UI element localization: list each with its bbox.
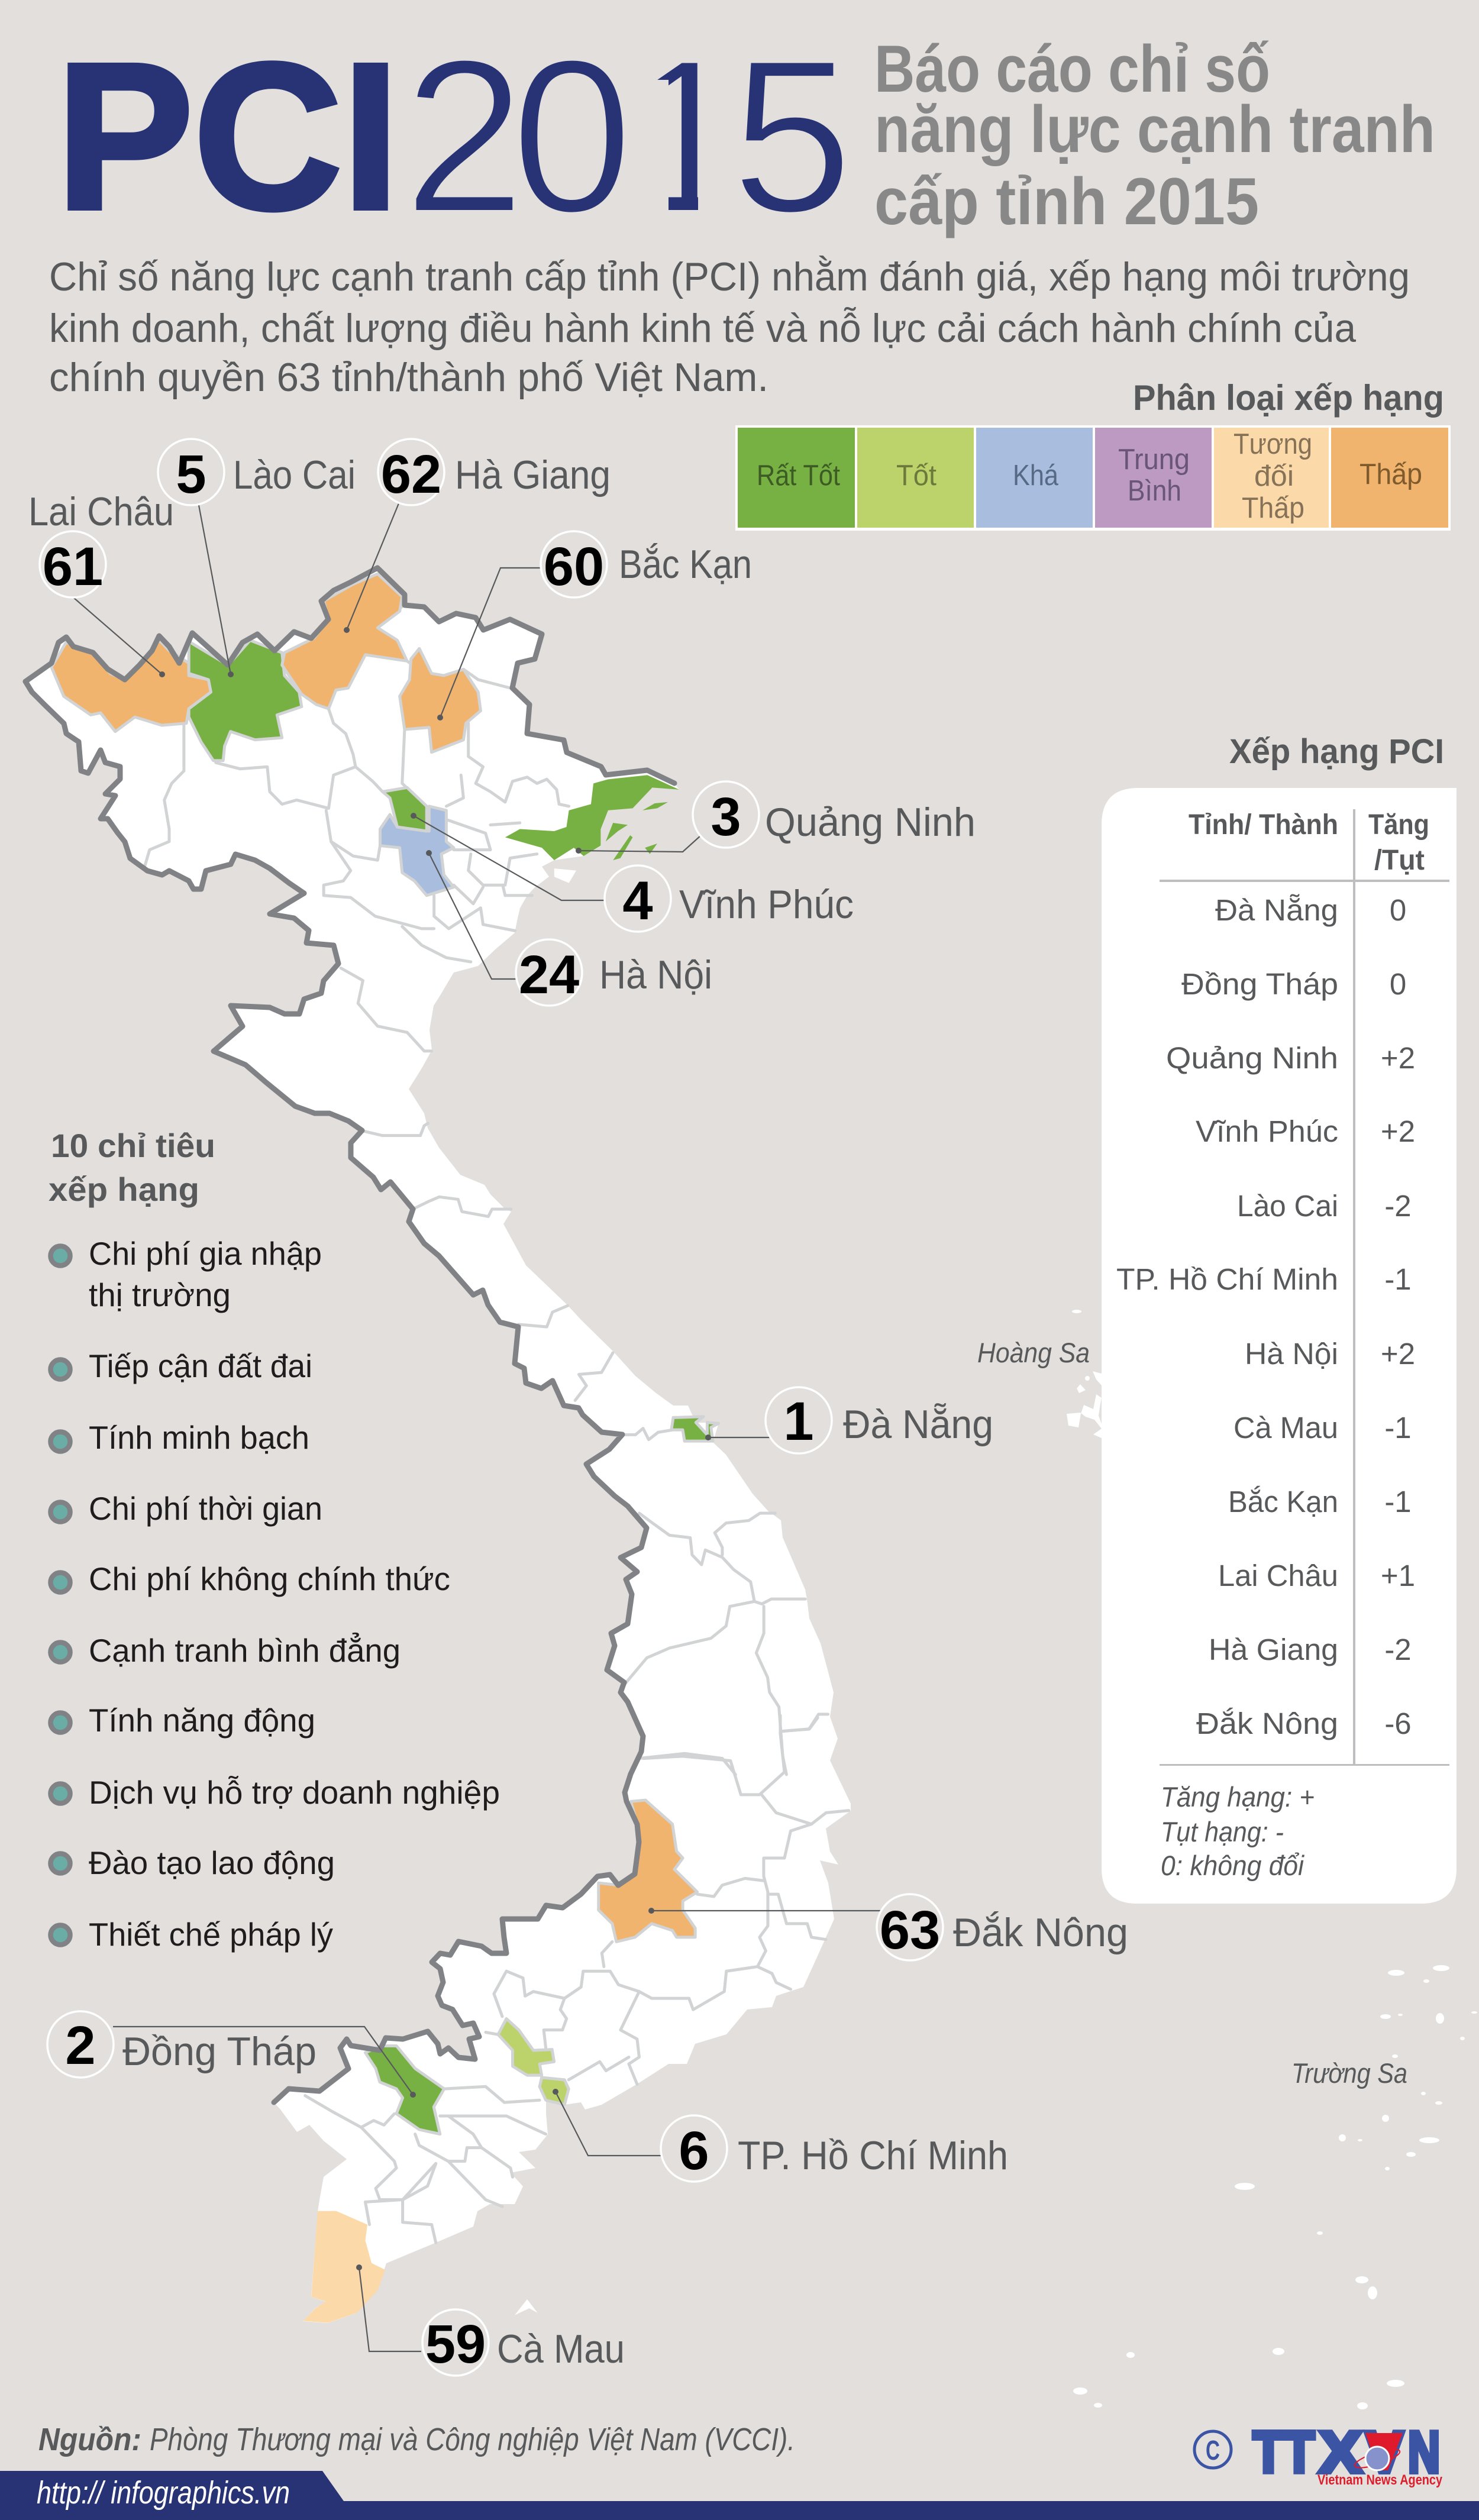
province boundaries: centre xyxy=(362,1123,828,1775)
Quảng Ninh islands xyxy=(642,802,668,810)
table rows: Hà Giang xyxy=(1209,1633,1338,1666)
table header xyxy=(1189,809,1429,876)
callout: Đà Nẵng 1 xyxy=(705,1387,993,1453)
legend: rating categories: Tốt xyxy=(896,460,937,492)
label: Trường Sa: Trường Sa xyxy=(1291,2057,1407,2089)
Vĩnh Phúc xyxy=(383,787,427,831)
island xyxy=(515,2299,538,2315)
callout: Quảng Ninh 3 xyxy=(576,781,976,854)
source: Nguồn: xyxy=(38,2422,141,2457)
icon: copyright xyxy=(1194,2431,1231,2468)
subtitle: Báo cáo chỉ số xyxy=(874,32,1270,106)
legend: rating categories: đối xyxy=(1254,460,1294,492)
indicator names: Chi phí không chính thức xyxy=(89,1561,450,1597)
table panel: PCI ranking xyxy=(1102,788,1457,1904)
callout: Bắc Kạn 60 xyxy=(437,531,752,721)
intro paragraph xyxy=(49,254,1410,400)
highlighted provinces: south xyxy=(303,1800,697,2323)
table rows: -1 xyxy=(1384,1485,1412,1519)
logo: TTXVN: V xyxy=(1365,2419,1403,2485)
callout: Quảng Ninh 3: Quảng Ninh xyxy=(765,800,976,845)
callout: Đắk Nông 63: 63 xyxy=(880,1900,940,1960)
table header: Tỉnh/ Thành xyxy=(1189,809,1338,841)
callout: Cà Mau 59 xyxy=(356,2264,625,2376)
islands: Hoàng Sa xyxy=(1067,1371,1102,1438)
footer url: http:// infographics.vn xyxy=(37,2475,290,2511)
table rows: -6 xyxy=(1384,1707,1412,1740)
table notes: Tăng hạng: + xyxy=(1161,1781,1315,1813)
national border: western xyxy=(25,681,647,2102)
table rows: -1 xyxy=(1384,1262,1412,1296)
callout: Đà Nẵng 1: 1 xyxy=(783,1391,814,1452)
callout: Hà Nội 24: Hà Nội xyxy=(599,952,712,997)
title: PCI 2015: 5 xyxy=(731,14,853,259)
callout: Lai Châu 61 xyxy=(28,489,174,677)
table rows: +1 xyxy=(1381,1559,1415,1592)
label: Hoàng Sa: Hoàng Sa xyxy=(977,1337,1090,1368)
Lai Châu xyxy=(51,640,211,732)
callout: TP. Hồ Chí Minh 6: TP. Hồ Chí Minh xyxy=(738,2133,1008,2178)
callout: Đắk Nông 63 xyxy=(648,1894,1128,1960)
table rows: +2 xyxy=(1381,1337,1415,1371)
table rows: -1 xyxy=(1384,1411,1412,1445)
table rows: Hà Nội xyxy=(1245,1337,1338,1371)
footer bar xyxy=(0,2471,1479,2520)
Hà Giang xyxy=(282,574,407,709)
callout: Hà Nội 24 xyxy=(426,850,712,1006)
table heading: Xếp hạng PCI xyxy=(1229,732,1444,771)
callout: Hà Giang 62: 62 xyxy=(381,444,441,505)
icon: copyright: C xyxy=(1206,2435,1220,2466)
legend: rating categories: Bình xyxy=(1128,475,1181,507)
logo: TTXVN: X xyxy=(1319,2419,1362,2485)
callout: TP. Hồ Chí Minh 6 xyxy=(553,2089,1008,2182)
table rows: Bắc Kạn xyxy=(1228,1485,1338,1519)
list heading: 10 chỉ tiêu: 10 chỉ tiêu xyxy=(51,1127,215,1164)
intro paragraph: chính quyền 63 tỉnh/thành phố Việt Nam. xyxy=(49,355,768,400)
list: 10 indicators xyxy=(51,1235,500,1953)
table rows: Cà Mau xyxy=(1233,1411,1338,1445)
callout: Cà Mau 59: 59 xyxy=(425,2314,486,2374)
logo: TTXVN: Vietnam News Agency xyxy=(1317,2472,1443,2488)
table rows: 0 xyxy=(1390,967,1406,1001)
white islands xyxy=(554,868,576,883)
table rows: -2 xyxy=(1384,1189,1412,1223)
province boundaries: south xyxy=(305,1715,849,2243)
indicator names: Tính năng động xyxy=(89,1702,315,1739)
indicator names: Chi phí gia nhập xyxy=(89,1235,322,1272)
title: PCI 2015 xyxy=(67,60,842,213)
table rows: Lào Cai xyxy=(1237,1189,1338,1223)
legend: rating categories xyxy=(735,425,1451,531)
table rows xyxy=(1116,893,1415,1740)
indicator names xyxy=(89,1235,500,1953)
source: Phòng Thương mại và Công nghiệp Việt Nam (VCCI). xyxy=(150,2422,795,2457)
table rows: Đà Nẵng xyxy=(1215,893,1338,927)
title: PCI 2015: 2 xyxy=(403,14,525,259)
callout: Lào Cai 5 xyxy=(158,439,356,677)
Đắk Nông xyxy=(599,1800,697,1941)
highlighted provinces: north xyxy=(51,574,679,896)
callout: Bắc Kạn 60: 60 xyxy=(544,537,604,597)
callout: Lào Cai 5: 5 xyxy=(176,444,206,505)
legend: rating categories: Thấp xyxy=(1242,492,1304,524)
callout: Đồng Tháp 2: 2 xyxy=(65,2015,96,2076)
table rows: TP. Hồ Chí Minh xyxy=(1116,1262,1338,1296)
Đồng Tháp xyxy=(365,2046,444,2134)
province boundaries: north xyxy=(145,605,569,1051)
intro paragraph: Chỉ số năng lực cạnh tranh cấp tỉnh (PCI) nhằm đánh giá, xếp hạng môi trường xyxy=(49,254,1410,299)
legend: rating categories: Rất Tốt xyxy=(757,460,840,492)
Hà Nội xyxy=(380,806,454,896)
callout: Hà Nội 24: 24 xyxy=(519,945,579,1005)
bullet marks xyxy=(51,1246,70,1945)
callout: Cà Mau 59: Cà Mau xyxy=(497,2327,625,2372)
table rows: +2 xyxy=(1381,1041,1415,1075)
table rows: +2 xyxy=(1381,1114,1415,1148)
title: PCI 2015: PCI xyxy=(56,20,399,253)
land xyxy=(25,568,851,2323)
callout: TP. Hồ Chí Minh 6: 6 xyxy=(679,2121,709,2181)
callout: Đồng Tháp 2 xyxy=(47,2011,416,2098)
Lào Cai xyxy=(189,640,302,761)
callout: Hà Giang 62: Hà Giang xyxy=(455,453,611,497)
indicator names: Đào tạo lao động xyxy=(89,1844,335,1881)
callout: Quảng Ninh 3: 3 xyxy=(711,787,741,847)
logo: TTXVN: TT xyxy=(1253,2419,1315,2485)
callout: Lào Cai 5: Lào Cai xyxy=(233,453,356,497)
indicator names: thị trường xyxy=(89,1277,231,1313)
callout: Đồng Tháp 2: Đồng Tháp xyxy=(122,2029,317,2074)
table rows: Lai Châu xyxy=(1218,1559,1338,1592)
callout: Vĩnh Phúc 4 xyxy=(411,813,854,932)
table notes: Tụt hạng: - xyxy=(1161,1816,1284,1847)
callout: Lai Châu 61: 61 xyxy=(43,537,103,597)
callout: Lai Châu 61: Lai Châu xyxy=(28,489,174,534)
legend: rating categories: Trung xyxy=(1118,444,1190,476)
subtitle xyxy=(874,32,1435,238)
table rows: Đắk Nông xyxy=(1196,1707,1338,1740)
Quảng Ninh xyxy=(505,775,679,860)
list heading: 10 chỉ tiêu xyxy=(49,1127,215,1208)
Cà Mau xyxy=(303,2211,385,2323)
indicator names: Cạnh tranh bình đẳng xyxy=(89,1632,401,1669)
map of Vietnam xyxy=(25,568,851,2323)
national border xyxy=(25,568,674,783)
table rows: 0 xyxy=(1390,893,1406,927)
subtitle: cấp tỉnh 2015 xyxy=(874,164,1259,238)
legend: rating categories: Thấp xyxy=(1359,458,1422,490)
callout: Bắc Kạn 60: Bắc Kạn xyxy=(619,542,752,587)
callout: Đắk Nông 63: Đắk Nông xyxy=(953,1910,1128,1955)
table header: /Tụt xyxy=(1374,845,1425,876)
table rows: Đồng Tháp xyxy=(1181,967,1338,1001)
table notes: 0: không đổi xyxy=(1161,1850,1304,1881)
intro paragraph: kinh doanh, chất lượng điều hành kinh tế và nỗ lực cải cách hành chính của xyxy=(49,306,1356,351)
table header: Tăng xyxy=(1368,809,1429,841)
title: PCI 2015: 1 xyxy=(625,14,747,259)
legend heading: Phân loại xếp hạng xyxy=(1133,378,1444,418)
islands: Trường Sa xyxy=(1072,1310,1477,2409)
logo: TTXVN xyxy=(1253,2419,1443,2488)
table rows: Quảng Ninh xyxy=(1166,1041,1338,1075)
callout: Vĩnh Phúc 4: 4 xyxy=(622,871,653,931)
logo: TTXVN: N xyxy=(1408,2419,1440,2485)
callout: Hà Giang 62 xyxy=(344,439,611,633)
Long An xyxy=(498,2019,554,2075)
indicator names: Tiếp cận đất đai xyxy=(89,1348,312,1384)
table notes xyxy=(1161,1781,1315,1881)
legend: rating categories: Khá xyxy=(1013,460,1059,492)
indicator names: Thiết chế pháp lý xyxy=(89,1916,333,1953)
callout: Vĩnh Phúc 4: Vĩnh Phúc xyxy=(679,882,854,927)
indicator names: Dịch vụ hỗ trợ doanh nghiệp xyxy=(89,1774,500,1811)
indicator names: Tính minh bạch xyxy=(89,1419,309,1456)
indicator names: Chi phí thời gian xyxy=(89,1490,322,1527)
callout: Đà Nẵng 1: Đà Nẵng xyxy=(843,1402,993,1447)
highlighted province: Đà Nẵng xyxy=(671,1417,719,1441)
legend: rating categories: Tương xyxy=(1233,428,1312,460)
Bắc Kạn xyxy=(400,648,480,752)
table rows: Vĩnh Phúc xyxy=(1196,1114,1338,1148)
TP. Hồ Chí Minh xyxy=(540,2078,569,2105)
list heading: 10 chỉ tiêu: xếp hạng xyxy=(49,1171,199,1208)
title: PCI 2015: 0 xyxy=(511,14,633,259)
table rows: -2 xyxy=(1384,1633,1412,1666)
